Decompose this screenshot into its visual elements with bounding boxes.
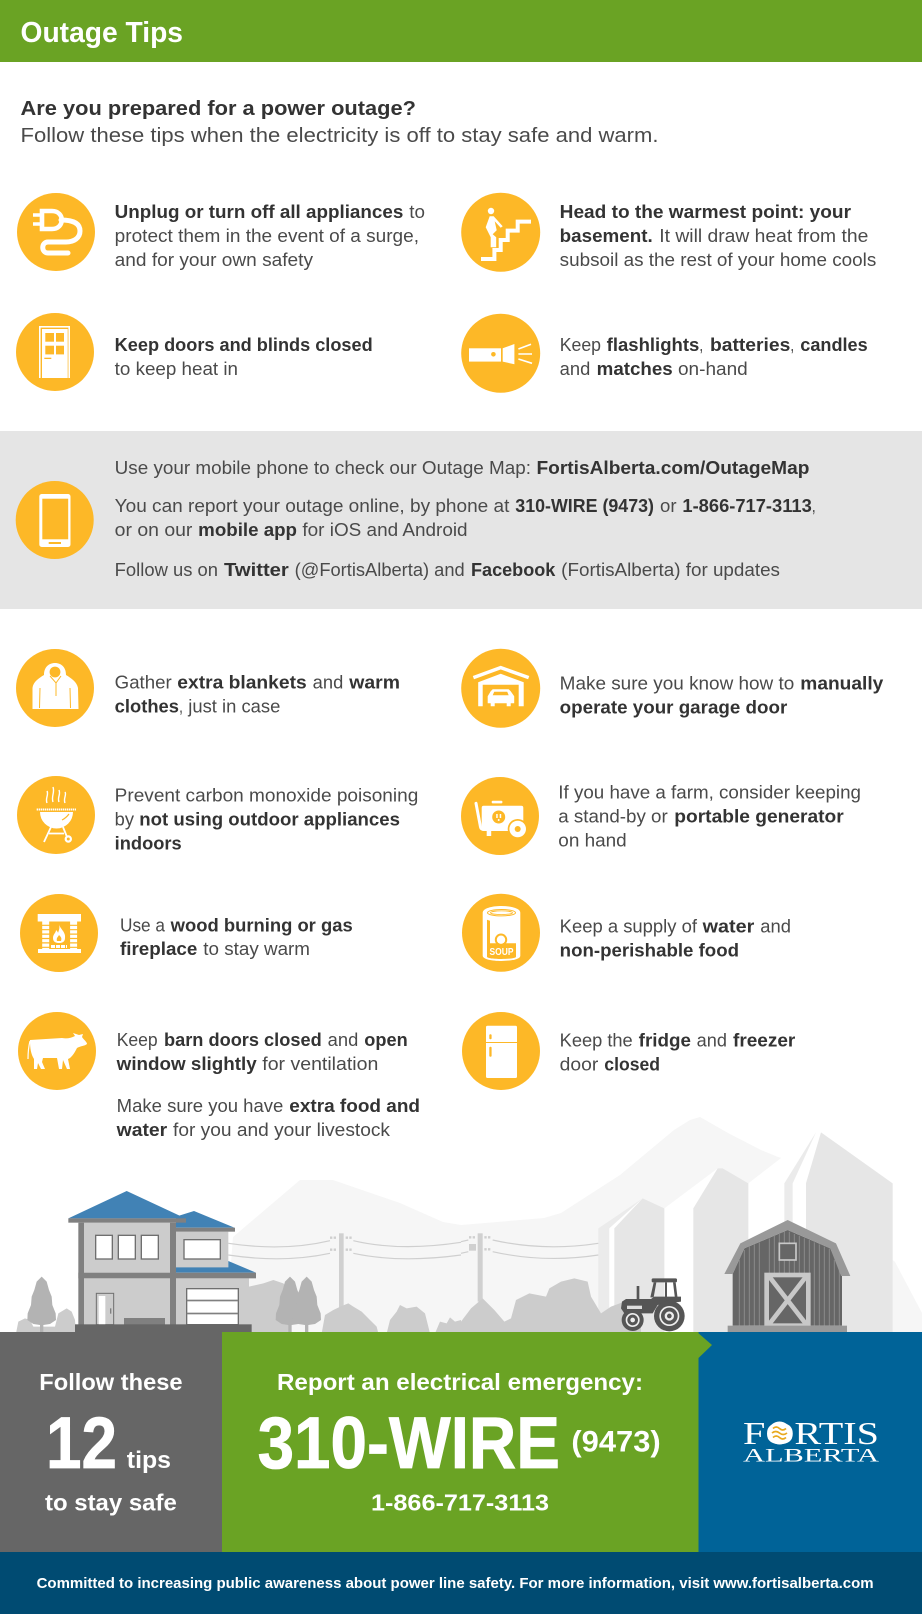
tip: unplug appliances: protect them in the event of a surge, (115, 226, 419, 246)
panel: mobile and outage reporting: Facebook (471, 560, 556, 580)
tip: head to basement (461, 193, 876, 272)
tip: water and food (462, 894, 791, 972)
icon: fireplace (20, 894, 98, 972)
icon: mobile phone (16, 481, 94, 559)
panel: mobile and outage reporting (0, 431, 922, 609)
panel: mobile and outage reporting: , (812, 496, 816, 516)
landscape: mountains and silos (225, 1117, 922, 1340)
icon: fridge (462, 1012, 540, 1090)
tip: fireplace (20, 894, 353, 972)
tip: carbon monoxide: by (115, 810, 134, 830)
footer bar: Committed to increasing public awareness about power line safety. For more information, visit www.fortisalberta.com (37, 1575, 874, 1592)
panel: follow these 12 tips: Follow these (39, 1369, 183, 1395)
tip: flashlights: on-hand (678, 359, 748, 379)
panel: mobile and outage reporting: or on our (115, 520, 192, 540)
tip: blankets and warm clothes: just in case (187, 696, 280, 716)
tip: head to basement: It will draw heat from the (659, 226, 868, 246)
tip: unplug appliances: Unplug or turn off all appliances (115, 202, 403, 222)
tip: garage door: Make sure you know how to (560, 673, 794, 693)
landscape: power lines (228, 1233, 598, 1308)
tip: barn and livestock: Make sure you have (117, 1096, 283, 1116)
tip: water and food: non-perishable food (560, 940, 739, 960)
landscape: barn (724, 1220, 850, 1332)
panel: follow these 12 tips (0, 1332, 222, 1552)
tip: flashlights: Keep (560, 335, 601, 355)
tip: flashlights: matches (597, 359, 673, 379)
logo: FortisAlberta (743, 1415, 879, 1466)
icon: cow (18, 1012, 96, 1090)
panel: mobile and outage reporting: 1-866-717-3113 (682, 496, 812, 516)
tip: fridge closed (462, 1012, 795, 1090)
panel: blue logo area (698, 1332, 922, 1552)
icon: barbecue (17, 776, 95, 854)
panel: report an electrical emergency: Report an electrical emergency: (277, 1369, 643, 1395)
tip: flashlights: flashlights (607, 335, 699, 355)
tip: barn and livestock (18, 1012, 420, 1140)
intro text: Follow these tips when the electricity is off to stay safe and warm. (20, 124, 658, 147)
tip: head to basement: subsoil as the rest of your home cools (560, 250, 876, 270)
panel: report an electrical emergency: 310-WIRE (258, 1403, 560, 1484)
arrow (697, 1332, 712, 1358)
tip: barn and livestock: Keep (117, 1030, 158, 1050)
tip: flashlights (461, 314, 868, 393)
tip: blankets and warm clothes: clothes (115, 696, 179, 716)
tip: keep doors closed (16, 313, 373, 391)
tip: carbon monoxide (17, 776, 418, 854)
panel: mobile and outage reporting: Twitter (224, 560, 289, 580)
tip: barn and livestock: and (328, 1030, 358, 1050)
logo: FortisAlberta: FORTIS (743, 1415, 879, 1451)
panel: mobile and outage reporting: mobile app (198, 520, 297, 540)
landscape: bushes (16, 1278, 641, 1333)
tip: barn and livestock: barn doors closed (164, 1030, 322, 1050)
tip: carbon monoxide: Prevent carbon monoxide poisoning (115, 786, 418, 806)
tip: portable generator (461, 777, 861, 855)
panel: mobile and outage reporting: or (660, 496, 676, 516)
tip: garage door: operate your garage door (560, 698, 787, 718)
header bar (0, 0, 922, 62)
tip: fridge closed: fridge (639, 1030, 691, 1050)
panel: mobile and outage reporting: Follow us on (115, 560, 218, 580)
trees near house (27, 1277, 321, 1332)
tip: barn and livestock: water (116, 1120, 167, 1140)
panel: follow these 12 tips: to stay safe (45, 1490, 177, 1516)
logo: FortisAlberta: ALBERTA (743, 1446, 879, 1466)
footer bar (0, 1552, 922, 1614)
tip: blankets and warm clothes: Gather (115, 672, 172, 692)
panel: mobile and outage reporting: FortisAlberta.com/OutageMap (536, 458, 809, 478)
panel: follow these 12 tips: 12 (46, 1403, 117, 1484)
icon: plug (17, 193, 95, 271)
tip: flashlights: and (560, 359, 590, 379)
tip: fridge closed: Keep the (560, 1030, 633, 1050)
landscape: house (27, 1191, 321, 1333)
panel: mobile and outage reporting: for iOS and Android (302, 520, 468, 540)
tip: barn and livestock: for ventilation (262, 1054, 378, 1074)
tip: flashlights: batteries (710, 335, 790, 355)
tip: carbon monoxide: not using outdoor appliances (139, 810, 400, 830)
panel: mobile and outage reporting: (FortisAlberta) for updates (561, 560, 780, 580)
tip: flashlights: , (699, 335, 703, 355)
tip: flashlights: candles (800, 335, 868, 355)
panel: report an electrical emergency: 1-866-717-3113 (371, 1490, 549, 1516)
tip: head to basement: Head to the warmest point: your (560, 202, 851, 222)
icon: stairs with person (461, 193, 540, 272)
panel: report an electrical emergency: (9473) (571, 1426, 661, 1459)
tip: fridge closed: closed (604, 1054, 660, 1074)
tip: garage door: manually (800, 673, 883, 693)
tip: fireplace: Use a (120, 916, 166, 936)
tip: fridge closed: freezer (733, 1030, 795, 1050)
tip: blankets and warm clothes (16, 649, 400, 727)
tip: fireplace: wood burning or gas (170, 916, 353, 936)
intro text (20, 97, 658, 147)
panel: mobile and outage reporting: You can report your outage online, by phone at (115, 496, 509, 516)
tip: barn and livestock: window slightly (116, 1054, 257, 1074)
tip: fireplace: to stay warm (203, 939, 310, 959)
panel: follow these 12 tips: tips (127, 1447, 171, 1474)
tip: blankets and warm clothes: and (313, 672, 343, 692)
tip: portable generator: portable generator (674, 807, 844, 827)
tip: blankets and warm clothes: warm (348, 672, 400, 692)
tip: portable generator: If you have a farm, consider keeping (558, 783, 861, 803)
tip: portable generator: a stand-by or (558, 807, 668, 827)
tip: water and food: Keep a supply of (560, 916, 698, 936)
tip: keep doors closed: Keep doors and blinds closed (115, 335, 373, 355)
tip: barn and livestock: extra food and (289, 1096, 420, 1116)
tip: barn and livestock: open (364, 1030, 408, 1050)
tip: water and food: water (702, 916, 754, 936)
tip: water and food: and (760, 916, 791, 936)
tip: barn and livestock: for you and your livestock (173, 1120, 391, 1140)
landscape: tractor (621, 1278, 685, 1331)
tip: unplug appliances (17, 193, 425, 271)
tip: keep doors closed: to keep heat in (115, 359, 238, 379)
tip: fridge closed: door (560, 1054, 598, 1074)
tip: unplug appliances: to (409, 202, 425, 222)
tip: flashlights: , (790, 335, 794, 355)
tip: blankets and warm clothes: , (179, 696, 183, 716)
icon: soup can (462, 894, 540, 972)
icon: garage (461, 649, 540, 728)
tip: carbon monoxide: indoors (115, 833, 182, 853)
panel: mobile and outage reporting: (@FortisAlberta) and (295, 560, 465, 580)
panel: report an electrical emergency (222, 1332, 712, 1552)
tip: garage door (461, 649, 883, 728)
icon: hoodie (16, 649, 94, 727)
icon: generator (461, 777, 539, 855)
tip: unplug appliances: and for your own safety (115, 250, 313, 270)
icon: flashlight (461, 314, 540, 393)
tip: blankets and warm clothes: extra blankets (177, 672, 307, 692)
panel: mobile and outage reporting: Use your mobile phone to check our Outage Map: (115, 458, 531, 478)
header bar: Outage Tips (20, 17, 183, 49)
tip: fridge closed: and (697, 1030, 727, 1050)
intro text: Are you prepared for a power outage? (20, 97, 416, 120)
icon: door (16, 313, 94, 391)
tip: portable generator: on hand (558, 831, 627, 851)
tip: head to basement: basement. (560, 226, 653, 246)
tip: fireplace: fireplace (120, 939, 197, 959)
panel: mobile and outage reporting: 310-WIRE (9473) (515, 496, 654, 516)
icon: soup can: SOUP (490, 947, 514, 958)
